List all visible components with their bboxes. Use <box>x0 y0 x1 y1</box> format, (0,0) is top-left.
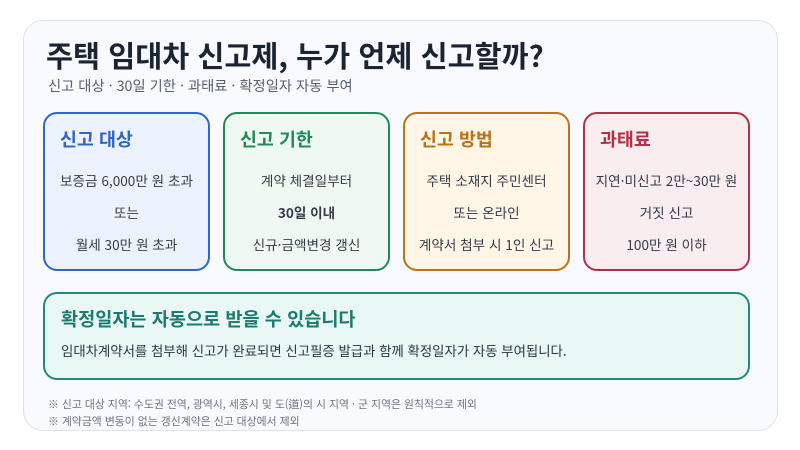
title: 주택 임대차 신고제, 누가 언제 신고할까? <box>46 34 544 76</box>
text: line 3: 신규·금액변경 갱신 <box>253 234 360 254</box>
text: line 1: 보증금 6,000만 원 초과 <box>60 170 193 190</box>
panel: 신고 대상 <box>43 112 210 271</box>
text: line 2: 30일 이내 <box>278 202 335 222</box>
heading: 신고 기한: 신고 기한 <box>240 126 313 152</box>
text: line 1: 지연·미신고 2만~30만 원 <box>596 170 737 190</box>
text: line 3: 월세 30만 원 초과 <box>76 234 177 254</box>
heading: 과태료: 과태료 <box>600 126 651 152</box>
subtitle: 신고 대상 · 30일 기한 · 과태료 · 확정일자 자동 부여 <box>48 75 353 96</box>
heading: 신고 방법: 신고 방법 <box>420 126 493 152</box>
panel: 신고 기한 <box>223 112 390 271</box>
text: line 3: 100만 원 이하 <box>626 234 707 254</box>
callout body: 임대차계약서를 첨부해 신고가 완료되면 신고필증 발급과 함께 확정일자가 자동 부여됩니다. <box>61 340 567 360</box>
heading: 신고 대상: 신고 대상 <box>60 126 133 152</box>
panel: 과태료 <box>583 112 750 271</box>
callout: 확정일자 <box>43 292 750 380</box>
text: line 1: 계약 체결일부터 <box>261 170 352 190</box>
text: line 2: 또는 온라인 <box>453 202 520 222</box>
callout heading: 확정일자는 자동으로 받을 수 있습니다 <box>61 305 356 332</box>
text: line 3: 계약서 첨부 시 1인 신고 <box>419 234 554 254</box>
footnote 2: ※ 계약금액 변동이 없는 갱신계약은 신고 대상에서 제외 <box>48 413 300 429</box>
text: line 2: 거짓 신고 <box>640 202 693 222</box>
panel: 신고 방법 <box>403 112 570 271</box>
footnote 1: ※ 신고 대상 지역: 수도권 전역, 광역시, 세종시 및 도(道)의 시 지역 · 군 지역은 원칙적으로 제외 <box>48 396 477 412</box>
text: line 1: 주택 소재지 주민센터 <box>426 170 547 190</box>
text: line 2: 또는 <box>114 202 139 222</box>
